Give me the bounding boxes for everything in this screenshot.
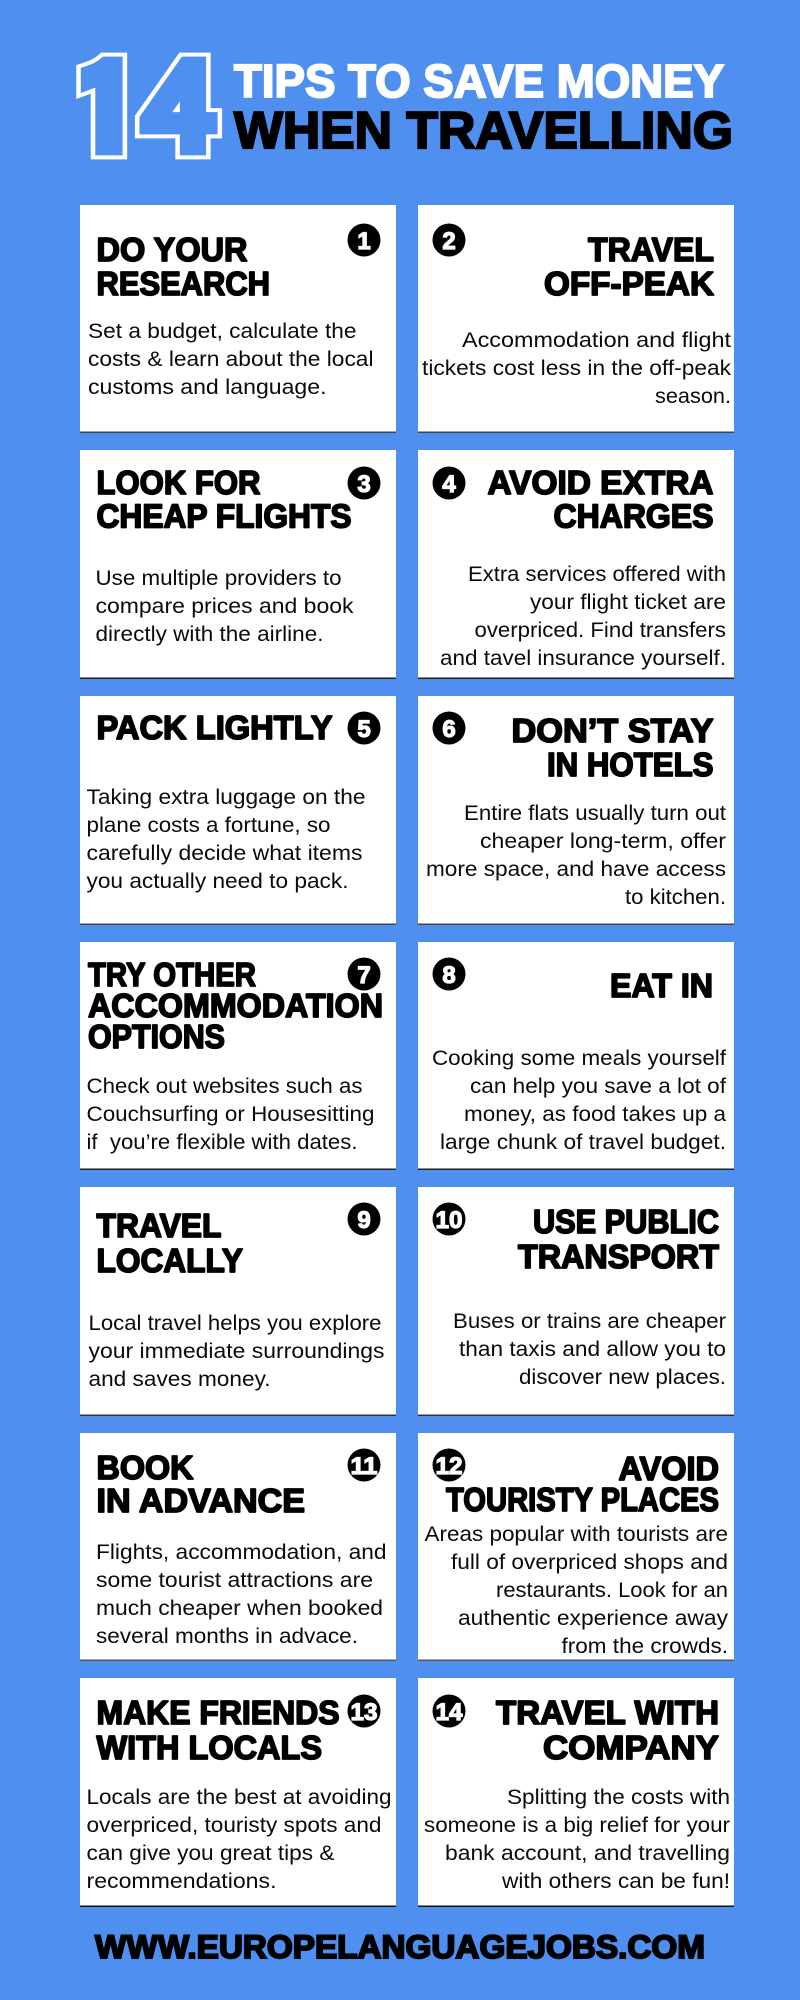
body 8: large chunk of travel budget. bbox=[440, 1131, 726, 1154]
heading 4 bbox=[488, 464, 714, 534]
big outlined number 14: 1 bbox=[72, 48, 142, 170]
body 4 bbox=[440, 563, 726, 670]
heading 11: IN ADVANCE bbox=[96, 1482, 305, 1519]
body 2: season. bbox=[655, 385, 731, 408]
panel: tip 6 bbox=[418, 696, 734, 925]
badge 10: 10 bbox=[436, 1207, 462, 1234]
heading 14 bbox=[496, 1694, 719, 1766]
panel: tip 11 bbox=[80, 1433, 396, 1661]
panel: tip 9 bbox=[80, 1187, 396, 1416]
body 3: Use multiple providers to bbox=[96, 567, 342, 590]
body 7 bbox=[86, 1075, 374, 1154]
heading 13: WITH LOCALS bbox=[96, 1729, 322, 1766]
badge 2: 2 bbox=[442, 228, 456, 255]
body 1: costs & learn about the local bbox=[88, 348, 374, 371]
badge 8: 8 bbox=[442, 962, 456, 989]
body 8 bbox=[432, 1047, 726, 1154]
heading 3: CHEAP FLIGHTS bbox=[96, 498, 352, 534]
badge 5: 5 bbox=[357, 716, 371, 743]
badge 3: 3 bbox=[357, 471, 371, 498]
body 5: Taking extra luggage on the bbox=[86, 786, 366, 809]
body 14: with others can be fun! bbox=[501, 1870, 730, 1893]
body 9: Local travel helps you explore bbox=[88, 1312, 382, 1335]
body 12: restaurants. Look for an bbox=[496, 1579, 728, 1602]
body 5: you actually need to pack. bbox=[86, 870, 348, 893]
panel: tip 1 bbox=[80, 205, 396, 433]
body 13: overpriced, touristy spots and bbox=[86, 1814, 382, 1837]
badge 10 bbox=[432, 1202, 466, 1236]
heading 12 bbox=[446, 1450, 719, 1518]
badge 11: 11 bbox=[350, 1453, 378, 1480]
footer website: WWW.EUROPELANGUAGEJOBS.COM bbox=[95, 1929, 705, 1965]
body 7: Check out websites such as bbox=[86, 1075, 362, 1098]
body 5 bbox=[86, 786, 366, 893]
panel: tip 7 bbox=[80, 942, 396, 1170]
body 6: more space, and have access bbox=[426, 858, 726, 881]
body 7: if you’re flexible with dates. bbox=[86, 1131, 358, 1154]
heading 12: TOURISTY PLACES bbox=[446, 1481, 719, 1518]
badge 13: 13 bbox=[350, 1699, 378, 1726]
badge 5 bbox=[348, 712, 380, 744]
heading 9 bbox=[96, 1207, 243, 1279]
heading 7: ACCOMMODATION bbox=[88, 987, 383, 1024]
badge 6: 6 bbox=[442, 716, 456, 743]
badge 12 bbox=[432, 1448, 466, 1482]
badge 2 bbox=[432, 224, 466, 256]
big outlined number 14: 1 bbox=[72, 48, 142, 170]
body 11: several months in advace. bbox=[96, 1625, 358, 1648]
body 12: Areas popular with tourists are bbox=[424, 1523, 728, 1546]
body 2: tickets cost less in the off-peak bbox=[422, 357, 732, 380]
badge 6 bbox=[432, 712, 466, 744]
panel: tip 12 bbox=[418, 1433, 734, 1661]
body 4: your flight ticket are bbox=[530, 591, 726, 614]
body 10: Buses or trains are cheaper bbox=[453, 1310, 726, 1333]
panel: tip 13 bbox=[80, 1678, 396, 1907]
body 12: from the crowds. bbox=[562, 1635, 728, 1658]
body 9: your immediate surroundings bbox=[88, 1340, 384, 1363]
body 6 bbox=[426, 802, 726, 909]
heading 2: OFF-PEAK bbox=[544, 265, 714, 302]
body 14: someone is a big relief for your bbox=[424, 1814, 730, 1837]
big outlined number 14: 4 bbox=[144, 48, 213, 170]
heading 1: RESEARCH bbox=[96, 265, 270, 302]
badge 14: 14 bbox=[436, 1699, 463, 1726]
body 1: Set a budget, calculate the bbox=[88, 320, 356, 343]
heading 7: OPTIONS bbox=[88, 1018, 225, 1055]
body 2 bbox=[422, 329, 732, 408]
badge 7 bbox=[348, 958, 380, 990]
panel: tip 10 bbox=[418, 1187, 734, 1416]
heading 2 bbox=[544, 231, 714, 302]
heading 1: DO YOUR bbox=[96, 231, 248, 268]
body 11: much cheaper when booked bbox=[96, 1597, 383, 1620]
body 12: authentic experience away bbox=[458, 1607, 729, 1630]
body 13: Locals are the best at avoiding bbox=[86, 1786, 392, 1809]
heading 10: USE PUBLIC bbox=[533, 1203, 719, 1240]
heading 6 bbox=[512, 712, 714, 783]
heading 3 bbox=[96, 464, 352, 534]
badge 3 bbox=[348, 466, 380, 500]
heading 7: TRY OTHER bbox=[88, 956, 256, 993]
body 7: Couchsurfing or Housesitting bbox=[86, 1103, 374, 1126]
badge 8 bbox=[432, 958, 466, 990]
badge 9: 9 bbox=[357, 1207, 371, 1234]
body 3 bbox=[96, 567, 354, 646]
heading 13: MAKE FRIENDS bbox=[96, 1694, 340, 1731]
heading 10 bbox=[518, 1203, 719, 1275]
body 14: Splitting the costs with bbox=[507, 1786, 730, 1809]
panel: tip 14 bbox=[418, 1678, 734, 1907]
badge 1: 1 bbox=[357, 228, 371, 255]
heading 4: CHARGES bbox=[554, 498, 714, 534]
heading 6: IN HOTELS bbox=[547, 746, 714, 783]
body 9 bbox=[88, 1312, 384, 1391]
heading 10: TRANSPORT bbox=[518, 1238, 719, 1275]
heading 11: BOOK bbox=[96, 1449, 194, 1486]
panel: tip 2 bbox=[418, 205, 734, 433]
body 11: some tourist attractions are bbox=[96, 1569, 373, 1592]
heading 2: TRAVEL bbox=[588, 231, 714, 268]
body 11 bbox=[96, 1541, 386, 1648]
body 10: than taxis and allow you to bbox=[459, 1338, 726, 1361]
heading 4: AVOID EXTRA bbox=[488, 464, 714, 501]
badge 11 bbox=[348, 1448, 380, 1482]
body 4: and tavel insurance yourself. bbox=[440, 647, 726, 670]
body 6: cheaper long-term, offer bbox=[480, 830, 726, 853]
body 3: directly with the airline. bbox=[96, 623, 324, 646]
heading 3: LOOK FOR bbox=[96, 464, 261, 501]
heading 5: PACK LIGHTLY bbox=[96, 709, 332, 746]
badge 4: 4 bbox=[442, 471, 456, 498]
badge 13 bbox=[348, 1694, 380, 1728]
heading 14: COMPANY bbox=[543, 1729, 719, 1766]
heading 8: EAT IN bbox=[610, 967, 713, 1004]
body 5: plane costs a fortune, so bbox=[86, 814, 330, 837]
heading 7 bbox=[88, 956, 383, 1055]
body 13 bbox=[86, 1786, 392, 1893]
badge 14 bbox=[432, 1694, 466, 1728]
body 4: Extra services offered with bbox=[468, 563, 726, 586]
body 4: overpriced. Find transfers bbox=[474, 619, 726, 642]
heading 11 bbox=[96, 1449, 305, 1519]
body 10: discover new places. bbox=[519, 1366, 726, 1389]
big outlined number 14 bbox=[72, 48, 213, 170]
body 8: Cooking some meals yourself bbox=[432, 1047, 726, 1070]
panel: tip 4 bbox=[418, 450, 734, 679]
body 10 bbox=[453, 1310, 726, 1389]
title line 2: WHEN TRAVELLING bbox=[234, 102, 733, 160]
heading 14: TRAVEL WITH bbox=[496, 1694, 719, 1731]
body 12: full of overpriced shops and bbox=[451, 1551, 728, 1574]
title line 1: TIPS TO SAVE MONEY bbox=[234, 55, 724, 107]
body 6: Entire flats usually turn out bbox=[464, 802, 726, 825]
body 14: bank account, and travelling bbox=[445, 1842, 730, 1865]
badge 4 bbox=[432, 466, 466, 500]
badge 7: 7 bbox=[357, 962, 371, 989]
heading 6: DON’T STAY bbox=[512, 712, 714, 749]
body 5: carefully decide what items bbox=[86, 842, 362, 865]
body 1 bbox=[88, 320, 374, 399]
body 6: to kitchen. bbox=[625, 886, 726, 909]
badge 9 bbox=[348, 1202, 380, 1236]
big outlined number 14: 4 bbox=[144, 48, 213, 170]
body 2: Accommodation and flight bbox=[462, 329, 731, 352]
body 8: money, as food takes up a bbox=[464, 1103, 726, 1126]
body 9: and saves money. bbox=[88, 1368, 270, 1391]
body 12 bbox=[424, 1523, 729, 1658]
heading 12: AVOID bbox=[618, 1450, 719, 1487]
panel: tip 5 bbox=[80, 696, 396, 925]
body 3: compare prices and book bbox=[96, 595, 354, 618]
body 14 bbox=[424, 1786, 730, 1893]
badge 1 bbox=[348, 224, 380, 256]
title bbox=[72, 48, 733, 170]
body 11: Flights, accommodation, and bbox=[96, 1541, 386, 1564]
heading 9: TRAVEL bbox=[96, 1207, 222, 1244]
body 13: recommendations. bbox=[86, 1870, 276, 1893]
body 1: customs and language. bbox=[88, 376, 326, 399]
heading 13 bbox=[96, 1694, 340, 1766]
badge 12: 12 bbox=[436, 1453, 462, 1480]
panel: tip 8 bbox=[418, 942, 734, 1170]
body 8: can help you save a lot of bbox=[470, 1075, 726, 1098]
heading 9: LOCALLY bbox=[96, 1242, 243, 1279]
body 13: can give you great tips & bbox=[86, 1842, 334, 1865]
heading 1 bbox=[96, 231, 270, 302]
panel: tip 3 bbox=[80, 450, 396, 679]
